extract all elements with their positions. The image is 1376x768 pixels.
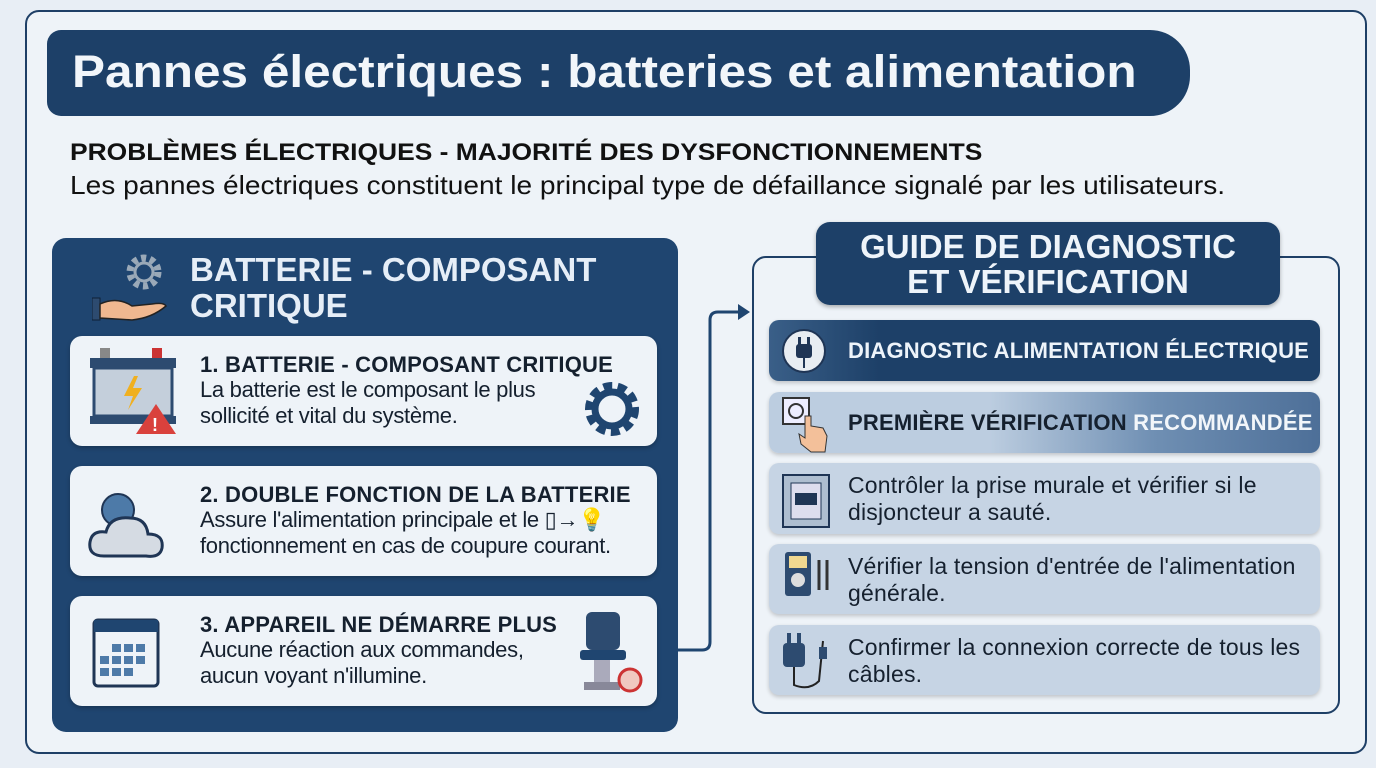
card 1: 1. BATTERIE - COMPOSANT CRITIQUE (200, 352, 613, 377)
row 1 (769, 320, 1320, 381)
subheading: PROBLÈMES ÉLECTRIQUES - MAJORITÉ DES DYSFONCTIONNEMENTS (70, 139, 982, 166)
icon: sun cloud (88, 493, 164, 558)
panel: guide (752, 256, 1340, 714)
card 1: sollicité et vital du système. (200, 403, 458, 428)
icon: battery: ! (152, 415, 158, 435)
title bar: Pannes électriques : batteries et alimentation (72, 46, 1137, 97)
row 2 (769, 392, 1320, 453)
icon: cable (783, 633, 827, 688)
card 2: Assure l'alimentation principale et le ▯→💡 (200, 507, 605, 532)
row 4: Vérifier la tension d'entrée de l'alimentation (848, 553, 1296, 579)
row 5: câbles. (848, 661, 922, 687)
row 3: Contrôler la prise murale et vérifier si le (848, 472, 1257, 498)
icon: socket hand (782, 397, 828, 452)
icon: battery (90, 348, 176, 435)
panel heading: CRITIQUE (190, 287, 348, 324)
row 1: DIAGNOSTIC ALIMENTATION ÉLECTRIQUE (848, 338, 1309, 363)
icon: gear hand (92, 254, 167, 321)
icon: breaker (782, 474, 830, 528)
card 2: fonctionnement en cas de coupure courant. (200, 533, 611, 558)
row 4 (769, 544, 1320, 614)
guide heading: GUIDE DE DIAGNOSTIC (860, 228, 1236, 265)
icon: chair (580, 612, 642, 692)
panel heading: BATTERIE - COMPOSANT (190, 251, 596, 288)
icon: gear (585, 382, 639, 436)
guide heading (816, 222, 1280, 305)
card 3: aucun voyant n'illumine. (200, 663, 427, 688)
row 3 (769, 463, 1320, 534)
icon: multimeter (785, 552, 828, 596)
card 2 (70, 466, 657, 576)
panel heading (190, 251, 596, 324)
icon: plug (782, 329, 826, 373)
card 1 (70, 336, 657, 446)
row 2: PREMIÈRE VÉRIFICATION RECOMMANDÉE (848, 410, 1313, 435)
card 3 (70, 596, 657, 706)
guide heading: ET VÉRIFICATION (907, 263, 1189, 300)
icon: calendar (92, 618, 160, 688)
intro text: Les pannes électriques constituent le principal type de défaillance signalé par les utilisateurs. (70, 170, 1225, 200)
card 2: 2. DOUBLE FONCTION DE LA BATTERIE (200, 482, 631, 507)
row 5: Confirmer la connexion correcte de tous les (848, 634, 1300, 660)
panel: battery (52, 238, 678, 732)
arrow: connector (678, 304, 750, 652)
row 4: générale. (848, 580, 946, 606)
card 1: La batterie est le composant le plus (200, 377, 535, 402)
card 3: 3. APPAREIL NE DÉMARRE PLUS (200, 612, 557, 637)
row 3: disjoncteur a sauté. (848, 499, 1051, 525)
row 5 (769, 625, 1320, 695)
title bar (47, 30, 1190, 116)
card 3: Aucune réaction aux commandes, (200, 637, 524, 662)
